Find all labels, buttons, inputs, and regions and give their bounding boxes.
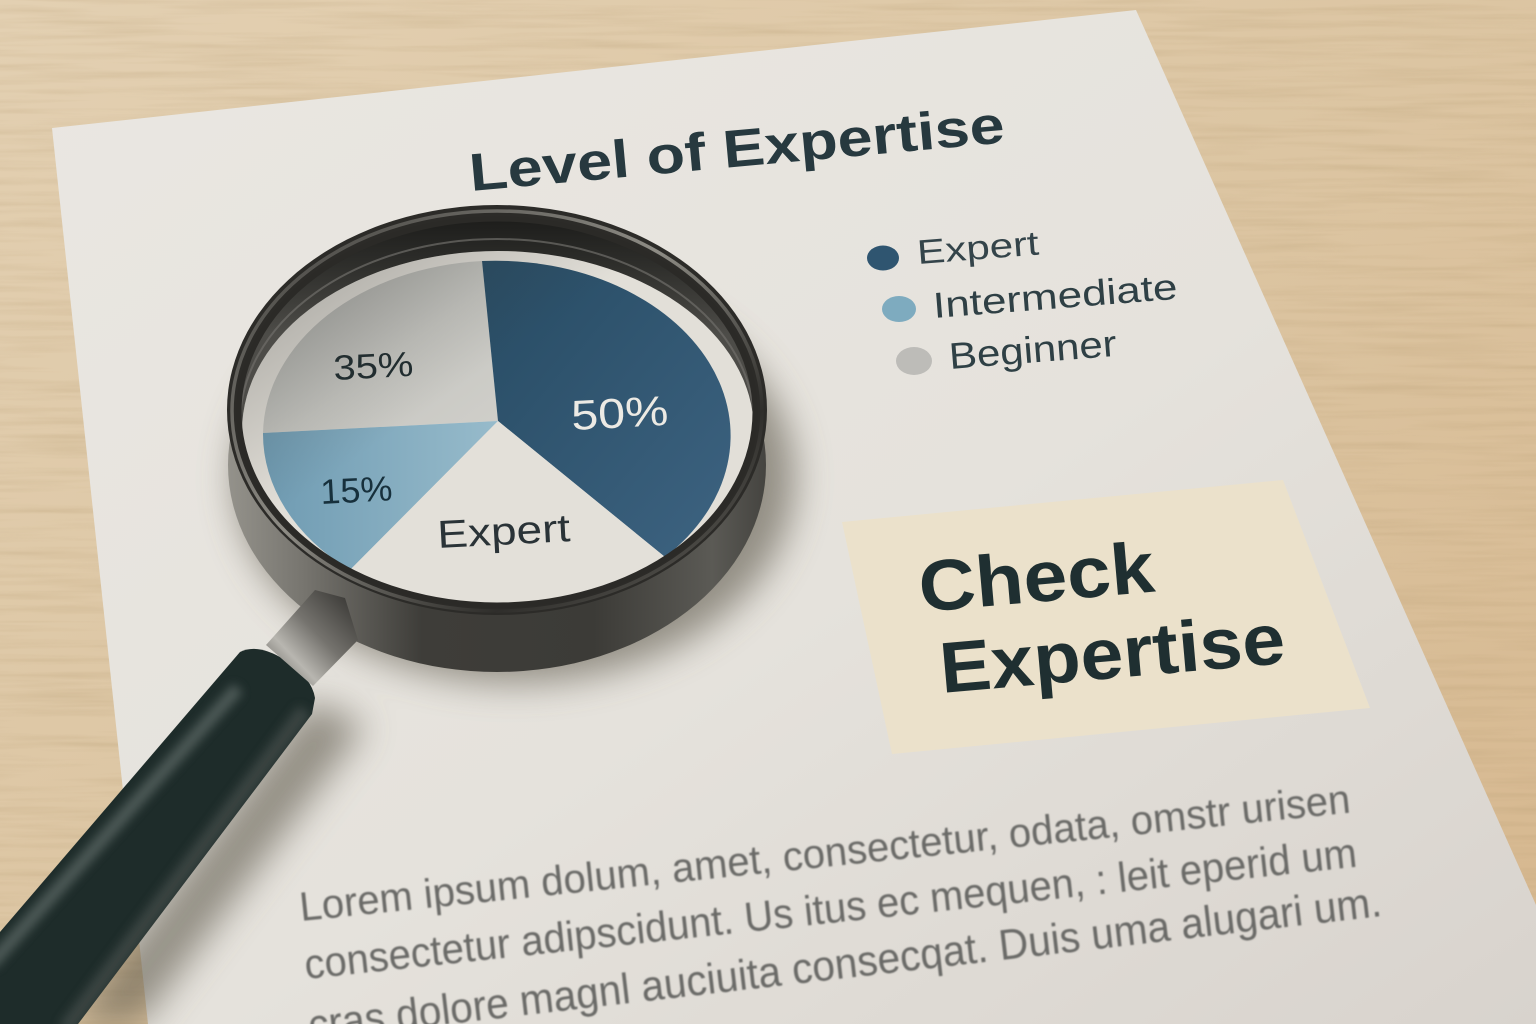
line 2: consectetur adipscidunt. Us itus ec mequen, : leit eperid um [302,829,1359,988]
pie slice: expert [352,421,664,568]
line 1: Lorem ipsum dolum, amet, consectetur, odata, omstr urisen [297,776,1352,930]
lens floor shadow [242,251,584,488]
pie slice: 35 percent [263,261,498,433]
title: Level of Expertise [467,96,1007,203]
rim highlight [232,211,762,611]
callout text line 2: Expertise [936,599,1288,709]
legend item: intermediate [882,266,1179,326]
legend item: beginner [896,323,1118,377]
body paragraph [297,776,1384,1024]
lens body side [228,258,766,672]
lens rim [227,205,767,615]
pie slice: 15 percent [263,421,498,570]
legend [867,224,1179,377]
legend item: intermediate: Intermediate [931,266,1179,326]
handle ferrule [266,590,358,686]
label 35 percent: 35% [332,345,414,388]
lens floor [242,251,752,568]
pie slice: 50 percent [482,261,731,557]
label 15 percent: 15% [319,469,393,512]
callout box: check expertise [842,480,1370,754]
pie chart [263,260,731,568]
label 50 percent: 50% [570,387,669,439]
callout text line 1: Check [915,528,1159,628]
legend item: expert: Expert [916,224,1041,272]
lens opening [239,219,755,611]
magnifying glass [0,205,767,1024]
legend item: beginner: Beginner [947,323,1118,377]
handle grip [0,649,315,1024]
rim front edge [239,219,755,605]
legend item: expert [867,224,1041,272]
shadows under magnifier [70,273,795,1024]
label expert: Expert [436,507,571,557]
